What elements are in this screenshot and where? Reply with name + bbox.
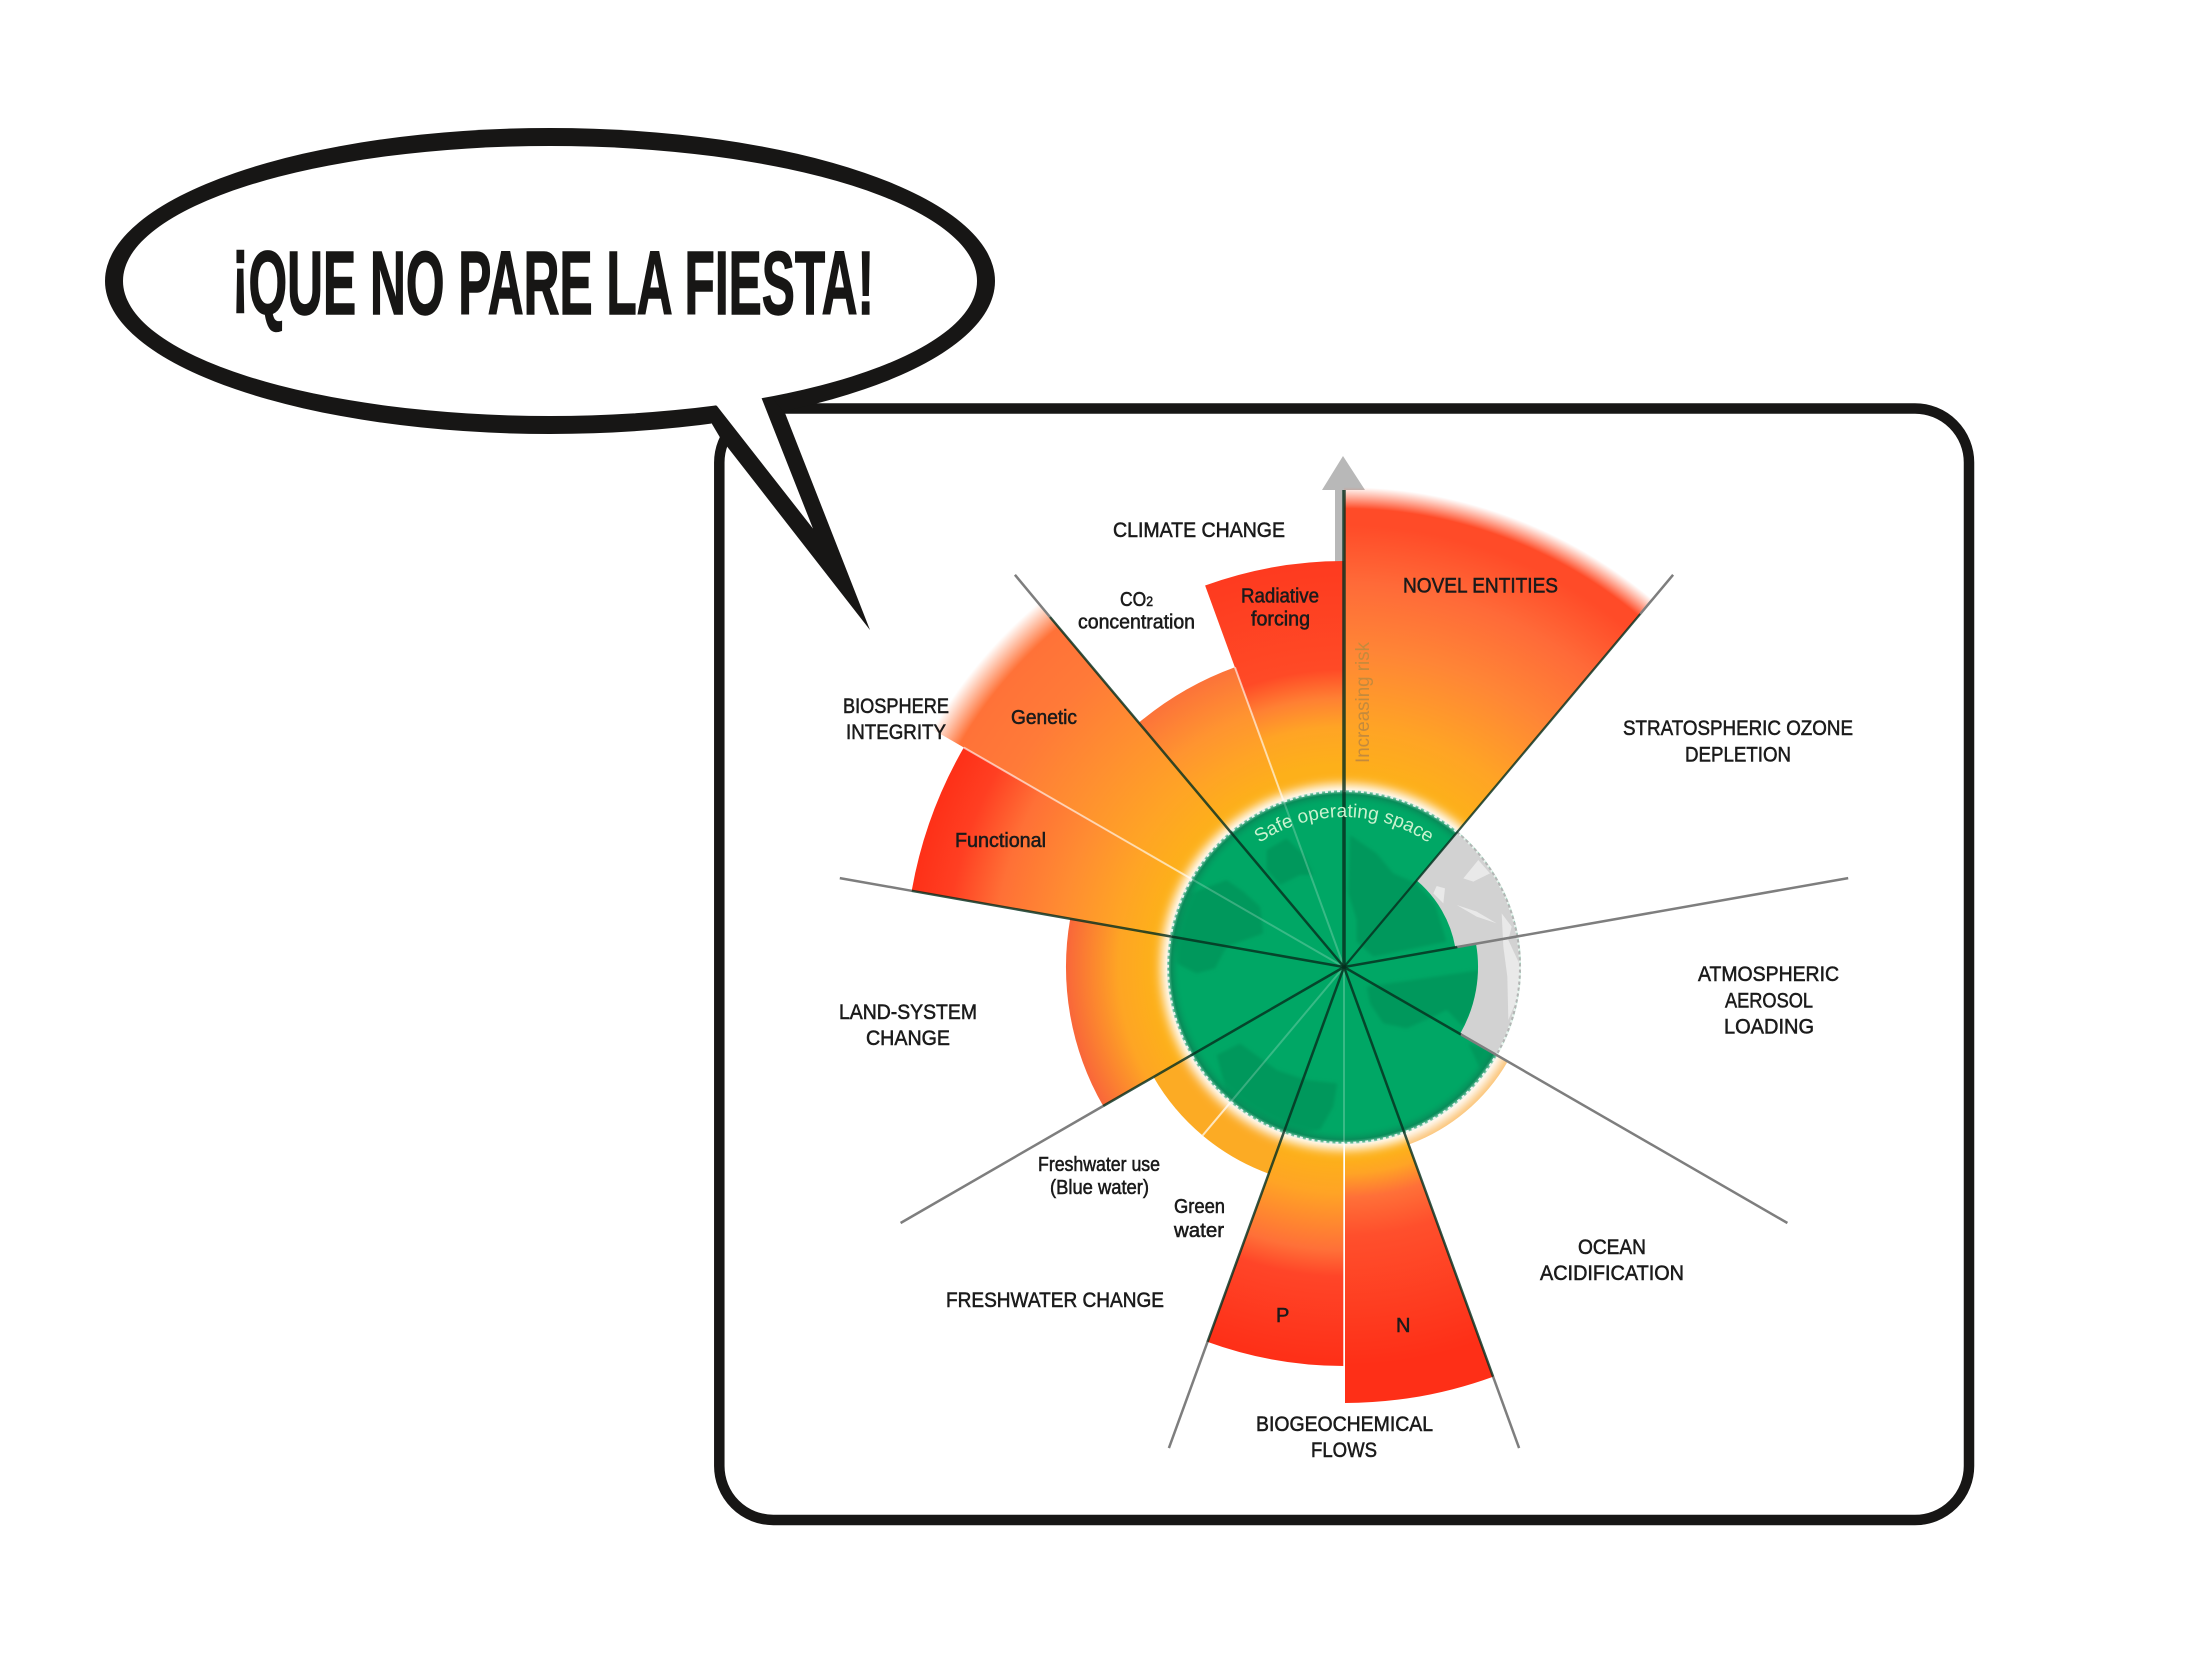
- label: climate change: CLIMATE CHANGE: [1113, 519, 1285, 542]
- label: genetic: Genetic: [1011, 707, 1077, 729]
- sector: functional biosphere integrity: [912, 748, 1344, 967]
- dotted edge of the disc: [1168, 791, 1520, 1143]
- label: biogeochemical flows: FLOWS: [1311, 1439, 1377, 1462]
- bubble outline: [105, 128, 995, 434]
- label: land-system change: LAND-SYSTEM: [839, 1001, 977, 1024]
- label: biogeochemical flows: BIOGEOCHEMICAL: [1256, 1413, 1433, 1436]
- label: ocean acidification: OCEAN: [1578, 1236, 1646, 1259]
- glow around the safe operating space: [1161, 784, 1527, 1150]
- light continents on the grey area: [1433, 860, 1521, 1020]
- bubble text: ¡: [232, 218, 249, 318]
- label: atmospheric aerosol loading: LOADING: [1724, 1016, 1814, 1039]
- label: atmospheric aerosol loading: AEROSOL: [1725, 989, 1813, 1012]
- tail interior: [700, 380, 813, 529]
- arrow: increasing risk: [1322, 456, 1365, 565]
- label: green water: Green: [1174, 1196, 1225, 1218]
- sector: radiative forcing: [1205, 561, 1344, 967]
- label: functional: Functional: [955, 830, 1046, 852]
- safe operating space disc: [1167, 790, 1521, 1144]
- label: radiative forcing: forcing: [1251, 608, 1310, 630]
- label: stratospheric ozone depletion: [1623, 717, 1853, 766]
- label: biosphere integrity: INTEGRITY: [846, 721, 946, 744]
- label: freshwater use: Freshwater use: [1038, 1154, 1160, 1176]
- spokes: outer grey parts: [840, 575, 1848, 1448]
- label: freshwater change: FRESHWATER CHANGE: [946, 1289, 1164, 1312]
- sector: nitrogen flow: [1344, 967, 1493, 1403]
- label: radiative forcing: [1241, 586, 1319, 630]
- sector: genetic biosphere integrity: [932, 602, 1344, 967]
- rim shading of the disc: [1167, 790, 1521, 1144]
- bubble interior: [123, 146, 977, 416]
- label: atmospheric aerosol loading: ATMOSPHERIC: [1698, 963, 1839, 986]
- label: ocean acidification: [1540, 1236, 1684, 1285]
- label: CO2 concentration: [1078, 589, 1195, 634]
- label: biogeochemical flows: [1256, 1413, 1433, 1462]
- white sector dividers: [964, 667, 1344, 1366]
- label: biosphere integrity: [843, 695, 949, 744]
- label: green water: [1173, 1196, 1225, 1242]
- label: N: N: [1396, 1315, 1410, 1337]
- label: novel entities: NOVEL ENTITIES: [1403, 574, 1558, 598]
- continents on the disc: [1174, 835, 1498, 1135]
- label: ocean acidification: ACIDIFICATION: [1540, 1262, 1684, 1285]
- label: stratospheric ozone depletion: DEPLETION: [1685, 744, 1791, 766]
- label: stratospheric ozone depletion: STRATOSPHERIC OZONE: [1623, 717, 1853, 740]
- label: CO2 concentration: concentration: [1078, 612, 1195, 634]
- label: land-system change: CHANGE: [866, 1027, 950, 1050]
- label: freshwater use: (Blue water): [1050, 1177, 1149, 1199]
- panel: rounded frame around the diagram: [719, 408, 1969, 1520]
- sector: land-system change: [1066, 919, 1344, 1106]
- label: green water: water: [1173, 1220, 1224, 1242]
- sector: CO2 concentration: [1139, 667, 1344, 967]
- label: CO2 concentration: CO2: [1120, 589, 1153, 611]
- label: freshwater use: [1038, 1154, 1160, 1199]
- disc label: safe operating space: Safe operating space: [1254, 804, 1432, 842]
- label: atmospheric aerosol loading: [1698, 963, 1839, 1039]
- spokes: inner dark parts: [912, 490, 1640, 1377]
- axis label: increasing risk: Increasing risk: [1353, 642, 1374, 763]
- grey area: boundaries not yet reached: [1417, 832, 1520, 1055]
- speech bubble: [105, 128, 995, 630]
- sector: phosphorus flow: [1208, 967, 1344, 1366]
- bubble text: QUE NO PARE LA FIESTA!: [249, 234, 874, 334]
- sector: novel entities: [1344, 487, 1652, 967]
- planetary boundaries chart: [840, 456, 1848, 1448]
- label: radiative forcing: Radiative: [1241, 586, 1319, 608]
- tail outline: [712, 395, 870, 630]
- sector: freshwater change: [1154, 967, 1344, 1174]
- sector: ocean acidification: [1344, 967, 1508, 1145]
- label: P: P: [1276, 1305, 1289, 1327]
- label: land-system change: [839, 1001, 977, 1050]
- label: biosphere integrity: BIOSPHERE: [843, 695, 949, 718]
